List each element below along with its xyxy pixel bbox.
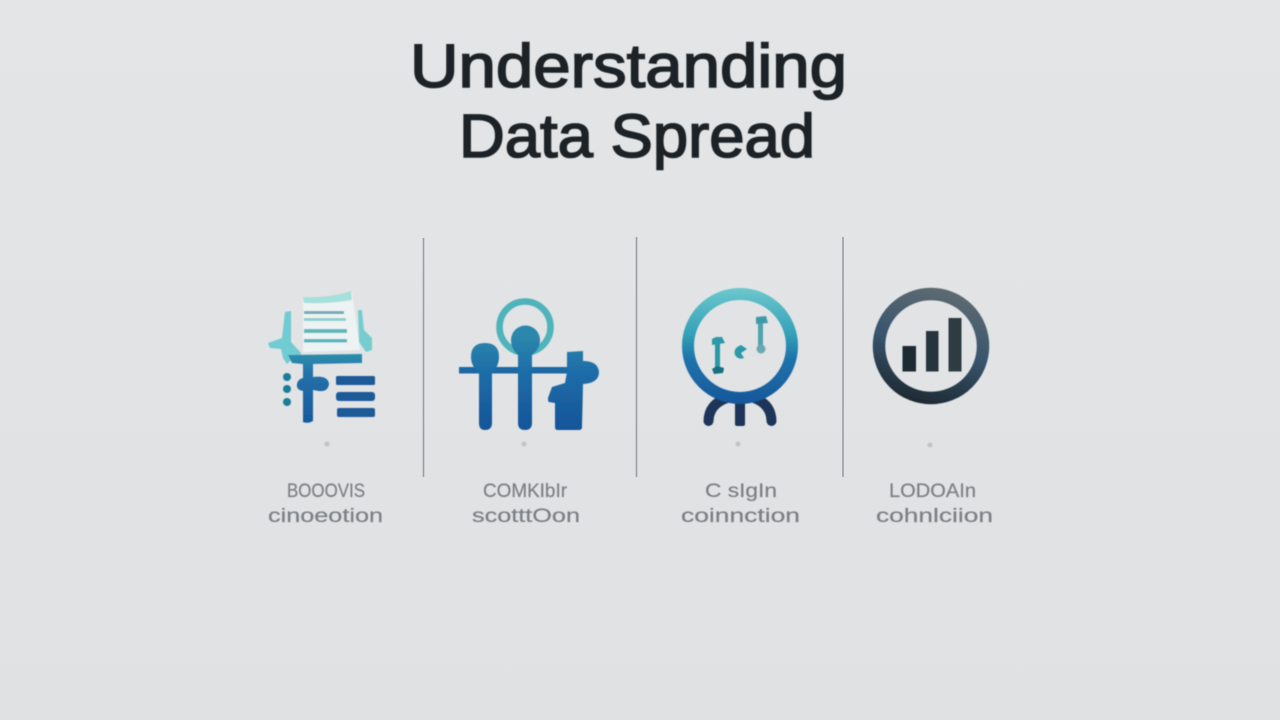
title: Understanding [410,32,847,100]
title: Data Spread [459,102,815,170]
label: column 3 [681,480,800,527]
label: column 1: BOOOVIS [287,480,365,502]
label: column 4: cohnlciion [876,505,993,527]
label: column 4: LODOAIn [889,480,976,502]
label: column 1: cinoeotion [268,505,383,527]
label: column 4 [876,480,993,527]
label: column 3: C sIgIn [705,480,777,502]
label: column 3: coinnction [681,505,800,527]
label: column 2: scotttOon [472,505,580,527]
icon: document list [268,291,375,423]
step markers [324,442,932,448]
label: column 1 [268,480,383,527]
title [410,32,847,170]
icon: connected pins [459,302,599,430]
labels [268,480,993,527]
column dividers [424,237,843,477]
label: column 2: COMKIbIr [483,480,567,502]
label: column 2 [472,480,580,527]
icon: bar chart in ring [879,294,983,398]
icon: circle with nodes on stand [688,294,792,426]
